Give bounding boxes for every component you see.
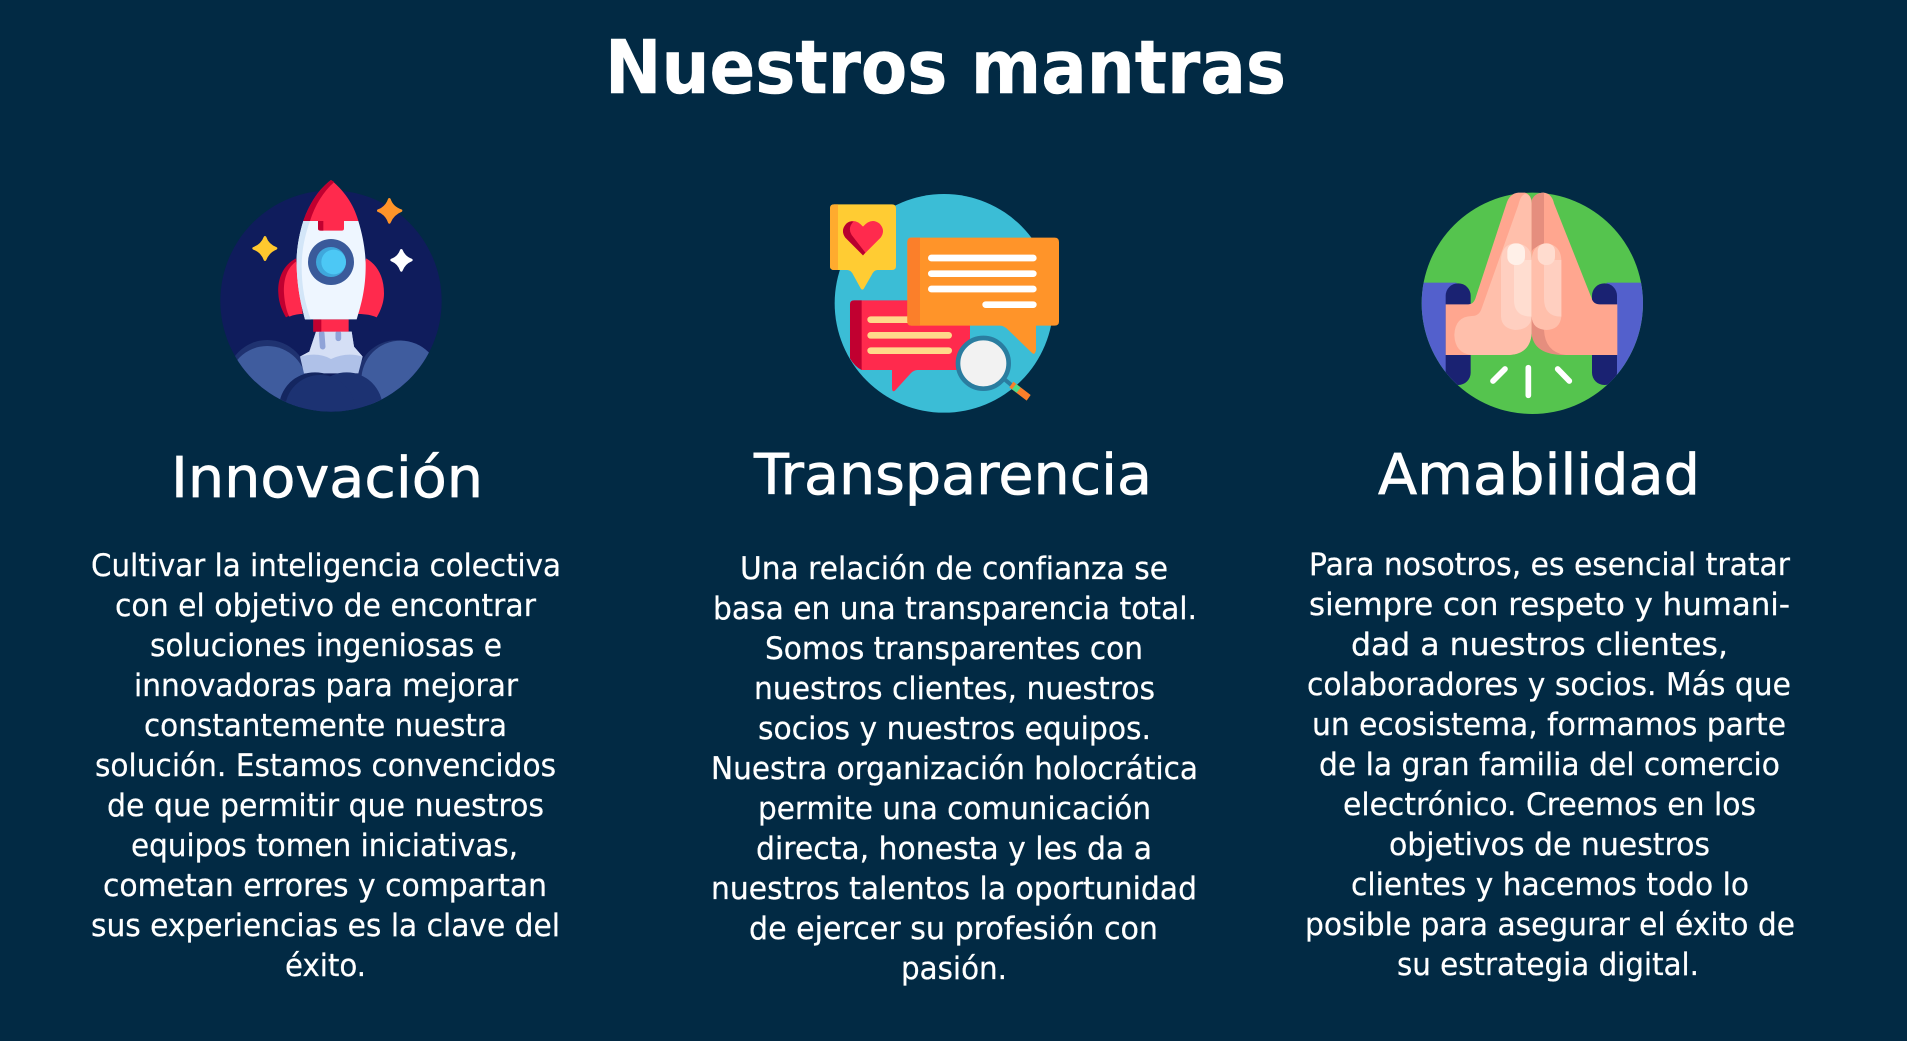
text block: posible para asegurar el éxito de <box>1305 907 1795 943</box>
text block: con el objetivo de encontrar <box>115 588 536 624</box>
text block: Para nosotros, es esencial tratar <box>1309 547 1790 583</box>
text block: equipos tomen iniciativas, <box>131 828 518 864</box>
text block: electrónico. Creemos en los <box>1343 787 1756 823</box>
text block: Nuestra organización holocrática <box>711 751 1198 787</box>
text block: siempre con respeto y humani- <box>1309 587 1790 623</box>
text block: dad a nuestros clientes, <box>1351 627 1728 663</box>
text block: solución. Estamos convencidos <box>95 748 556 784</box>
text block: objetivos de nuestros <box>1389 827 1710 863</box>
icon: speech bubbles <box>830 194 1059 413</box>
text block <box>91 548 561 984</box>
heading: Amabilidad <box>1378 443 1700 508</box>
panel: Transparencia <box>711 194 1198 987</box>
text block: éxito. <box>285 948 366 984</box>
text block: nuestros talentos la oportunidad <box>711 871 1197 907</box>
text block: innovadoras para mejorar <box>134 668 518 704</box>
text block: clientes y hacemos todo lo <box>1351 867 1749 903</box>
text block: soluciones ingeniosas e <box>150 628 502 664</box>
text block: permite una comunicación <box>758 791 1151 827</box>
heading: Transparencia <box>753 443 1152 508</box>
text block: Una relación de confianza se <box>740 551 1168 587</box>
text block: socios y nuestros equipos. <box>758 711 1151 747</box>
text block: directa, honesta y les da a <box>756 831 1152 867</box>
panel: Innovación <box>91 180 561 984</box>
text block: nuestros clientes, nuestros <box>754 671 1155 707</box>
text block: pasión. <box>901 951 1007 987</box>
text block: un ecosistema, formamos parte <box>1312 707 1786 743</box>
text block <box>1305 547 1795 983</box>
text block: cometan errores y compartan <box>103 868 547 904</box>
icon: rocket <box>220 180 442 412</box>
heading: Innovación <box>171 446 483 511</box>
text block: de ejercer su profesión con <box>749 911 1158 947</box>
text block: Somos transparentes con <box>765 631 1143 667</box>
panel: Amabilidad <box>1305 193 1795 983</box>
text block: de que permitir que nuestros <box>107 788 544 824</box>
text block: colaboradores y socios. Más que <box>1307 667 1791 703</box>
title: Nuestros mantras <box>605 25 1286 111</box>
text block <box>711 551 1198 987</box>
icon: praying hands <box>1420 193 1645 414</box>
text block: sus experiencias es la clave del <box>91 908 560 944</box>
text block: constantemente nuestra <box>144 708 507 744</box>
text block: Cultivar la inteligencia colectiva <box>91 548 561 584</box>
text block: basa en una transparencia total. <box>713 591 1197 627</box>
text block: su estrategia digital. <box>1397 947 1699 983</box>
text block: de la gran familia del comercio <box>1319 747 1780 783</box>
